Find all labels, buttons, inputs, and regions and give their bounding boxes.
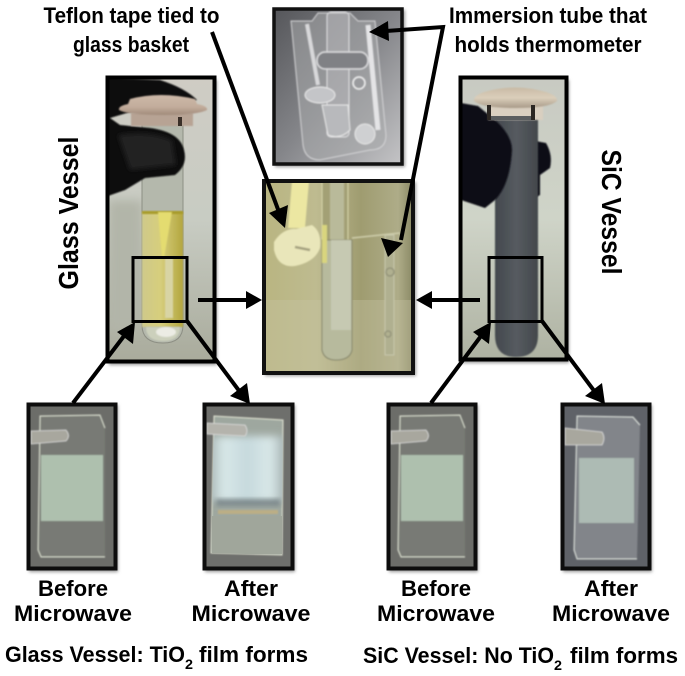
panel: glass vessel slide before microwave xyxy=(28,404,118,572)
icon: glass slide with hazy film xyxy=(208,416,286,555)
label: glass after microwave xyxy=(192,576,310,626)
icon: SiC tube xyxy=(495,113,538,357)
conclusion: glass vessel result: 2 xyxy=(185,656,193,672)
heading: immersion tube label: holds thermometer xyxy=(454,32,642,57)
label: SiC after microwave: Microwave xyxy=(552,601,670,626)
label: SiC Vessel: SiC Vessel xyxy=(596,150,627,274)
icon: black glove xyxy=(461,103,512,208)
icon: tweezers xyxy=(391,430,428,444)
label: glass after microwave: Microwave xyxy=(192,601,310,626)
label: SiC before microwave: Before xyxy=(401,576,471,601)
conclusion: SiC vessel result: 2 xyxy=(554,657,562,673)
conclusion: glass vessel result: film forms xyxy=(199,642,308,667)
icon: tweezers xyxy=(207,423,247,436)
heading: Teflon tape label: glass basket xyxy=(73,32,190,57)
arrow: SiC vessel to after slide xyxy=(542,321,605,404)
icon: tweezers xyxy=(565,428,604,445)
conclusion: glass vessel result: Glass Vessel: TiO xyxy=(5,642,185,667)
label: glass before microwave: Microwave xyxy=(14,601,132,626)
icon: glass thermometer well xyxy=(322,181,400,360)
icon: glass basket xyxy=(291,12,386,160)
label: glass before microwave xyxy=(14,576,132,626)
icon: glass tube xyxy=(142,112,183,343)
icon: black glove xyxy=(108,78,197,196)
label: Glass Vessel: Glass Vessel xyxy=(53,136,84,290)
arrow: SiC vessel to close-up xyxy=(416,291,480,309)
icon: tweezers xyxy=(31,430,68,444)
panel: central close-up of vessel interior xyxy=(264,181,416,376)
heading: Teflon tape label xyxy=(44,3,220,57)
icon: glass slide with film xyxy=(398,415,465,557)
heading: immersion tube label xyxy=(449,3,648,57)
label: SiC after microwave: After xyxy=(584,576,638,601)
panel: glass vessel photo xyxy=(108,78,217,365)
icon: glass slide with film xyxy=(38,415,105,557)
arrow: glass vessel to close-up xyxy=(198,291,262,309)
marker: SiC vessel inset square xyxy=(489,258,542,322)
icon: Teflon tape knot xyxy=(274,181,320,266)
arrow: immersion label to basket tube xyxy=(369,21,443,257)
arrow: before slide to glass vessel xyxy=(73,322,135,403)
conclusion: SiC vessel result: film forms xyxy=(570,643,678,668)
arrow: Teflon label to tape xyxy=(212,32,288,228)
label: SiC before microwave: Microwave xyxy=(377,601,495,626)
heading: immersion tube label: Immersion tube that xyxy=(449,3,648,28)
label: SiC after microwave xyxy=(552,576,670,626)
icon: vessel cap xyxy=(474,88,557,120)
arrow: before slide to SiC vessel xyxy=(431,322,491,403)
icon: black glove right fingers xyxy=(537,140,552,197)
conclusion: SiC vessel result: SiC Vessel: No TiO xyxy=(363,643,554,668)
panel: SiC vessel photo xyxy=(460,78,569,363)
heading: Teflon tape label: Teflon tape tied to xyxy=(44,3,220,28)
panel: immersion tube close-up xyxy=(274,9,405,167)
icon: vessel cap xyxy=(119,95,207,126)
conclusion: SiC vessel result xyxy=(363,643,678,673)
marker: glass vessel inset square xyxy=(133,258,187,322)
panel: glass vessel slide after microwave xyxy=(204,404,295,572)
panel: SiC vessel slide after microwave xyxy=(562,404,652,572)
label: SiC before microwave xyxy=(377,576,495,626)
conclusion: glass vessel result xyxy=(5,642,308,672)
label: glass before microwave: Before xyxy=(38,576,108,601)
panel: SiC vessel slide before microwave xyxy=(388,404,478,572)
label: glass after microwave: After xyxy=(224,576,278,601)
arrow: glass vessel to after slide xyxy=(187,321,250,404)
icon: glass slide with intact film xyxy=(574,416,640,559)
